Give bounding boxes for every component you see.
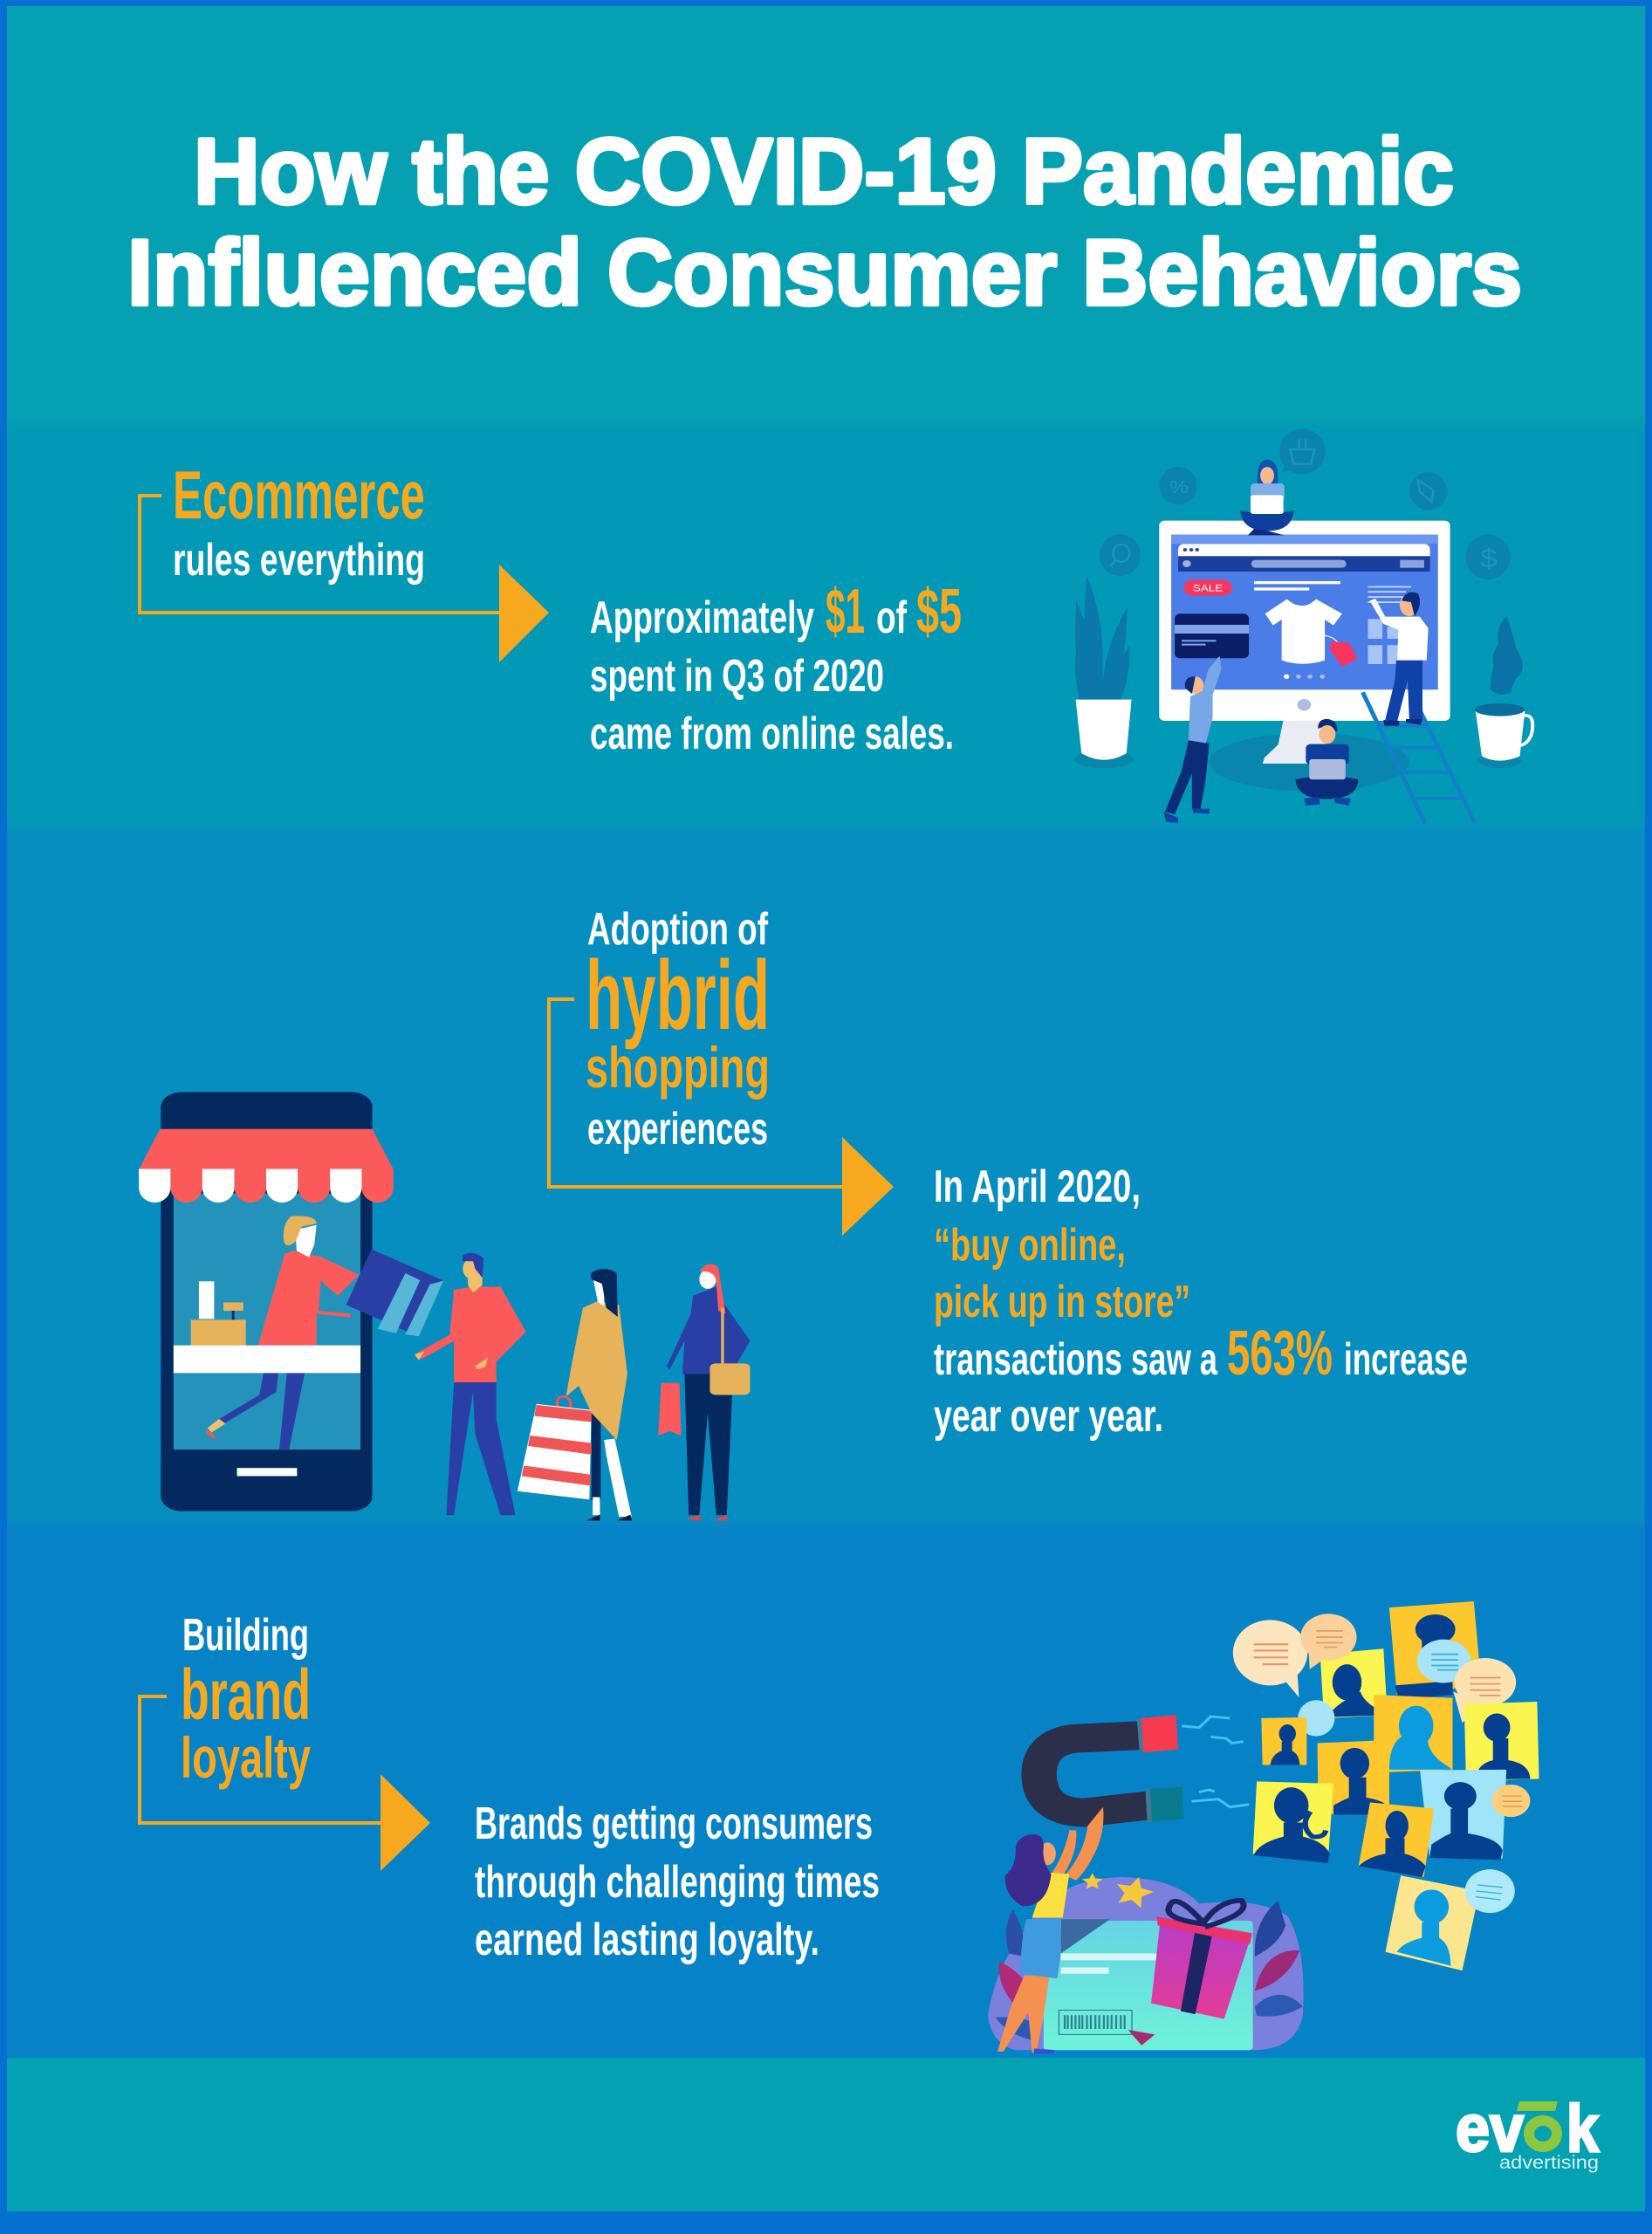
shopping box — [346, 1249, 443, 1336]
phone — [161, 1092, 373, 1511]
text block: hybrid stat: “buy online, — [934, 1220, 1126, 1271]
text block: ecommerce stat: Approximately — [590, 593, 814, 643]
speech bubbles — [1233, 1614, 1530, 1913]
icon circles: % — [1169, 476, 1189, 497]
gift scene background — [988, 1877, 1304, 2050]
text block: ecommerce stat: $5 — [916, 577, 962, 647]
person: man reaching — [1163, 656, 1221, 823]
illustration: online store monitor — [1074, 428, 1532, 823]
register — [191, 1281, 246, 1346]
text block: hybrid stat: pick up in store” — [934, 1277, 1190, 1327]
shopper: man — [415, 1253, 526, 1515]
gift — [1151, 1901, 1252, 2019]
customer cards — [1253, 1601, 1539, 1970]
logo: evok advertising: k — [1566, 2092, 1600, 2166]
text block: ecommerce stat: of — [876, 593, 907, 643]
person: man with laptop — [1295, 719, 1358, 805]
text block: loyalty: Brands getting consumers — [475, 1799, 873, 1849]
shopper: woman with purse — [658, 1264, 750, 1520]
clerk — [258, 1216, 359, 1346]
text block: ecommerce stat: $1 — [826, 577, 865, 647]
title: Influenced Consumer Behaviors — [127, 220, 1522, 325]
section 3 heading: brand loyalty: Building — [182, 1610, 309, 1661]
ladder — [1363, 692, 1475, 823]
text block: ecommerce stat — [590, 577, 962, 759]
logo: evok advertising — [1456, 2092, 1600, 2173]
section 1 heading: ecommerce — [173, 456, 425, 586]
text block: hybrid stat — [934, 1162, 1468, 1442]
person: woman with laptop — [1240, 460, 1293, 535]
monitor stand and shadow — [1210, 720, 1409, 791]
section 3 heading: brand loyalty: loyalty — [181, 1725, 311, 1790]
arrow: hybrid bracket — [549, 999, 894, 1236]
arrow: ecommerce bracket — [140, 496, 549, 662]
section 3 heading: brand loyalty — [181, 1610, 311, 1790]
clerk legs — [204, 1373, 305, 1449]
logo: evok advertising: advertising — [1499, 2153, 1599, 2173]
person: man on ladder — [1369, 593, 1429, 726]
text block: hybrid stat: In April 2020, — [934, 1162, 1141, 1212]
section 2 heading: hybrid: hybrid — [586, 941, 770, 1050]
text block: loyalty — [475, 1799, 880, 1965]
shopper: woman with striped bag — [518, 1269, 632, 1520]
logo: evok advertising: ev — [1456, 2092, 1524, 2166]
text block: hybrid stat: 563% — [1227, 1319, 1333, 1388]
section 2 heading: hybrid: Adoption of — [587, 904, 768, 955]
title: How the COVID-19 Pandemic — [194, 119, 1454, 223]
monitor: SALE — [1193, 582, 1223, 593]
magnet sparks — [1182, 1717, 1249, 1807]
icon circles: $ — [1480, 544, 1498, 572]
text block: hybrid stat: increase — [1344, 1334, 1468, 1385]
plant and coffee cup — [1074, 576, 1532, 769]
text block: hybrid stat: year over year. — [934, 1391, 1163, 1442]
woman reaching — [997, 1807, 1103, 2054]
title — [127, 119, 1522, 325]
icon circles — [1100, 428, 1511, 579]
section 3 heading: brand loyalty: brand — [181, 1655, 311, 1735]
section 1 heading: ecommerce: Ecommerce — [173, 456, 425, 533]
text block: ecommerce stat: came from online sales. — [590, 709, 954, 759]
illustration: phone storefront and shoppers — [139, 1092, 750, 1520]
section 2 heading: hybrid: shopping — [586, 1035, 770, 1100]
section 2 heading: hybrid: experiences — [587, 1104, 768, 1155]
arrow: loyalty bracket — [140, 1696, 430, 1871]
illustration: magnet attracting customers — [988, 1601, 1539, 2054]
awning — [139, 1129, 394, 1203]
text block: hybrid stat: transactions saw a — [934, 1334, 1218, 1385]
counter — [174, 1346, 360, 1373]
text block: loyalty: through challenging times — [475, 1857, 880, 1908]
stars — [1082, 1873, 1154, 1908]
magnet — [1039, 1715, 1183, 1823]
text block: loyalty: earned lasting loyalty. — [475, 1915, 819, 1965]
section 1 heading: ecommerce: rules everything — [173, 535, 425, 586]
monitor — [1159, 521, 1450, 721]
parcel box — [1044, 1919, 1253, 2050]
section 2 heading: hybrid — [586, 904, 770, 1155]
text block: ecommerce stat: spent in Q3 of 2020 — [590, 651, 884, 702]
